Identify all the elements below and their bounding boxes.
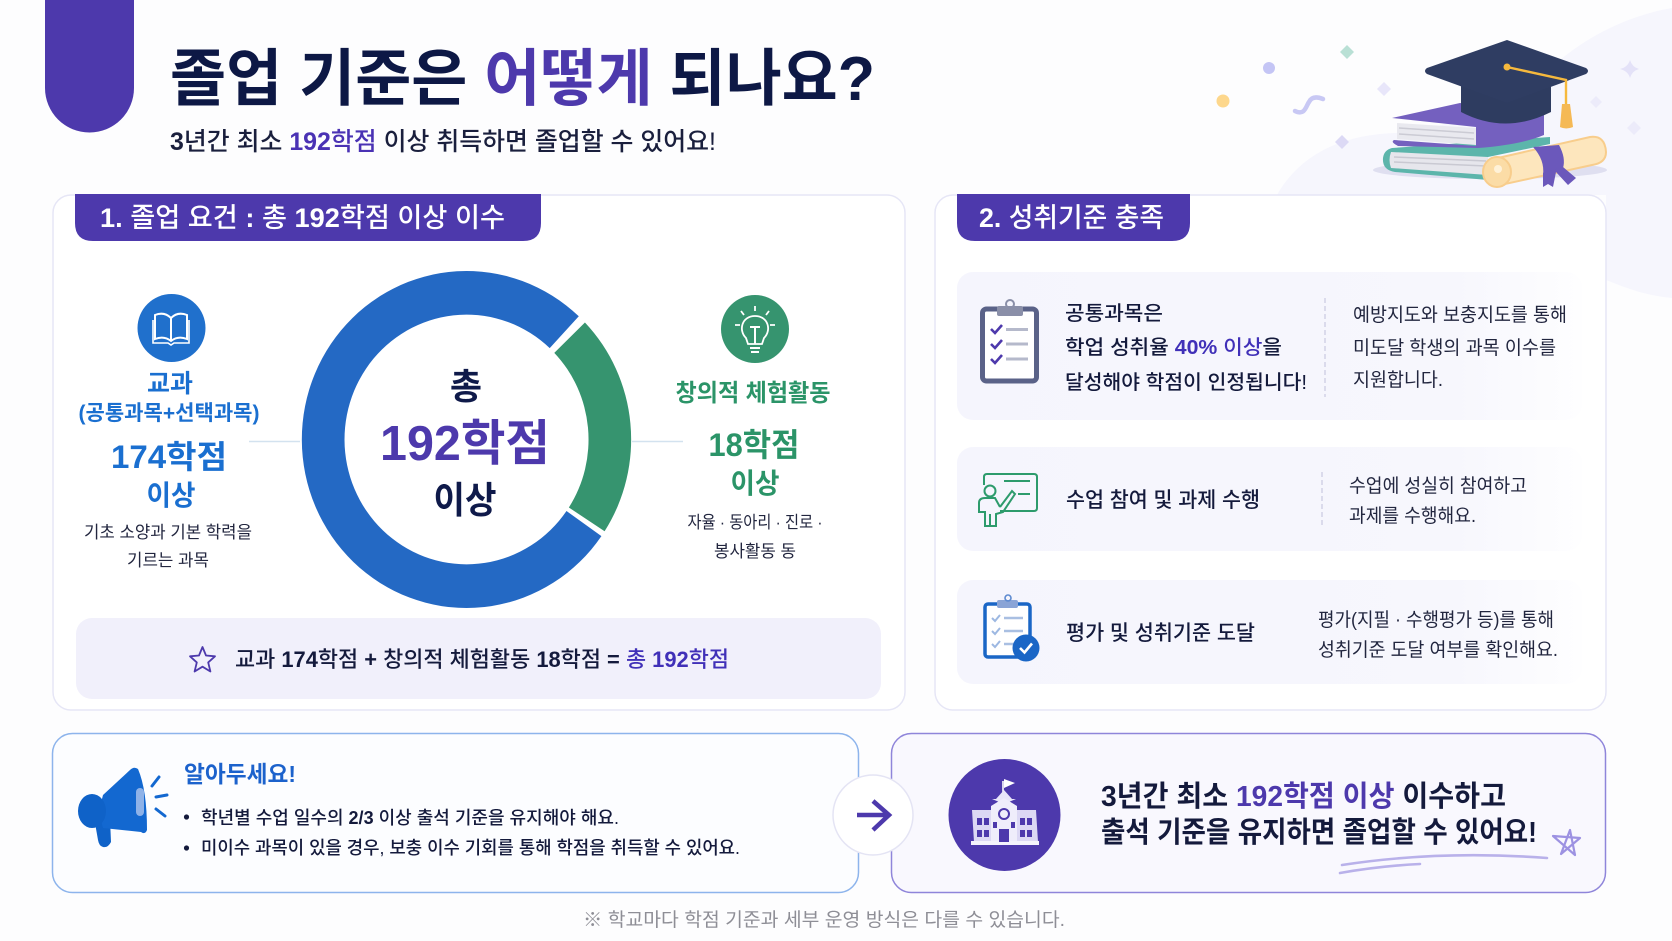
block: creative activity credits: 창의적 체험활동: [676, 380, 830, 407]
block: creative activity credits: 이상: [730, 468, 780, 499]
card main text: [1065, 302, 1307, 394]
icon: checklist clipboard: [982, 300, 1036, 381]
card main text: 평가 및 성취기준 도달: [1066, 622, 1255, 645]
callout bullets: [184, 808, 740, 858]
subtitle: 3년간 최소 192학점 이상 취득하면 졸업할 수 있어요!: [170, 128, 716, 156]
card main text: 학업 성취율 40% 이상을: [1065, 336, 1282, 359]
donut centre label: [380, 366, 550, 521]
card side text: [1349, 475, 1527, 527]
card side text: 성취기준 도달 여부를 확인해요.: [1318, 639, 1558, 661]
panel: achievement standard: [935, 194, 1606, 710]
conclusion text: [1101, 780, 1537, 849]
card main text: 달성해야 학점이 인정됩니다!: [1065, 371, 1307, 394]
block: creative activity credits: [676, 380, 830, 561]
donut centre label: 총: [450, 366, 482, 407]
donut chart: 192 credits: [302, 271, 631, 608]
card main text: 수업 참여 및 과제 수행: [1066, 489, 1260, 512]
callout bullets: 학년별 수업 일수의 2/3 이상 출석 기준을 유지해야 해요.: [201, 808, 619, 828]
illustration: graduation cap, books and diploma: [1373, 40, 1607, 187]
icon: open book: [138, 294, 206, 362]
connector lines: [249, 440, 683, 442]
decorative confetti: [1216, 45, 1641, 149]
icon: star: [190, 647, 215, 672]
donut centre label: 192학점: [380, 417, 550, 471]
icon: light bulb: [721, 295, 789, 363]
conclusion text: 3년간 최소 192학점 이상 이수하고: [1101, 780, 1506, 813]
icon: evaluation clipboard: [985, 595, 1040, 662]
block: subject credits: [78, 370, 260, 570]
block: subject credits: 기르는 과목: [127, 551, 209, 570]
block: creative activity credits: 자율 · 동아리 · 진로 ·: [688, 513, 822, 532]
block: creative activity credits: 봉사활동 동: [714, 542, 796, 561]
block: subject credits: 교과: [147, 370, 193, 398]
icon: school: [948, 759, 1060, 871]
arrow button: [833, 775, 913, 855]
section tab: achievement: 2. 성취기준 충족: [979, 203, 1164, 233]
section tab: achievement: [957, 194, 1190, 241]
card: common subjects: [957, 272, 1582, 420]
callout: things to know: [52, 734, 858, 892]
block: subject credits: 이상: [146, 480, 196, 511]
card side text: 평가(지필 · 수행평가 등)를 통해: [1318, 609, 1554, 631]
underline strokes: [1340, 855, 1547, 873]
section tab: requirement: [75, 194, 541, 241]
card: participation: [957, 447, 1582, 551]
footnote: ※ 학교마다 학점 기준과 세부 운영 방식은 다를 수 있습니다.: [583, 909, 1065, 931]
donut centre label: 이상: [434, 480, 496, 521]
section tab: requirement: 1. 졸업 요건 : 총 192학점 이상 이수: [100, 203, 505, 233]
callout: conclusion: [892, 734, 1606, 892]
block: subject credits: 174학점: [111, 439, 227, 475]
callout bullets: 미이수 과목이 있을 경우, 보충 이수 기회를 통해 학점을 취득할 수 있어요.: [201, 838, 740, 858]
card side text: [1318, 609, 1558, 661]
top-left bookmark tab: [45, 0, 134, 132]
card side text: 지원합니다.: [1353, 369, 1443, 391]
card main text: 공통과목은: [1065, 302, 1163, 325]
conclusion text: 출석 기준을 유지하면 졸업할 수 있어요!: [1101, 816, 1537, 849]
callout heading: 알아두세요!: [184, 761, 296, 787]
block: subject credits: 기초 소양과 기본 학력을: [84, 523, 252, 542]
card side text: 수업에 성실히 참여하고: [1349, 475, 1527, 497]
card: evaluation: [957, 580, 1582, 684]
summary bar: 교과 174학점 + 창의적 체험활동 18학점 = 총 192학점: [235, 647, 729, 672]
block: creative activity credits: 18학점: [708, 427, 800, 463]
card side text: 미도달 학생의 과목 이수를: [1353, 337, 1556, 359]
title: 졸업 기준은 어떻게 되나요?: [170, 45, 875, 114]
panel: graduation requirements: [53, 194, 905, 710]
card side text: 예방지도와 보충지도를 통해: [1353, 304, 1567, 326]
icon: sparkle star: [1553, 830, 1580, 855]
card side text: 과제를 수행해요.: [1349, 505, 1476, 527]
card side text: [1353, 304, 1567, 391]
icon: teacher at board: [979, 474, 1037, 526]
background blob: [1277, 8, 1672, 298]
block: subject credits: (공통과목+선택과목): [78, 402, 260, 425]
summary bar: [76, 618, 881, 699]
icon: megaphone: [78, 768, 167, 847]
